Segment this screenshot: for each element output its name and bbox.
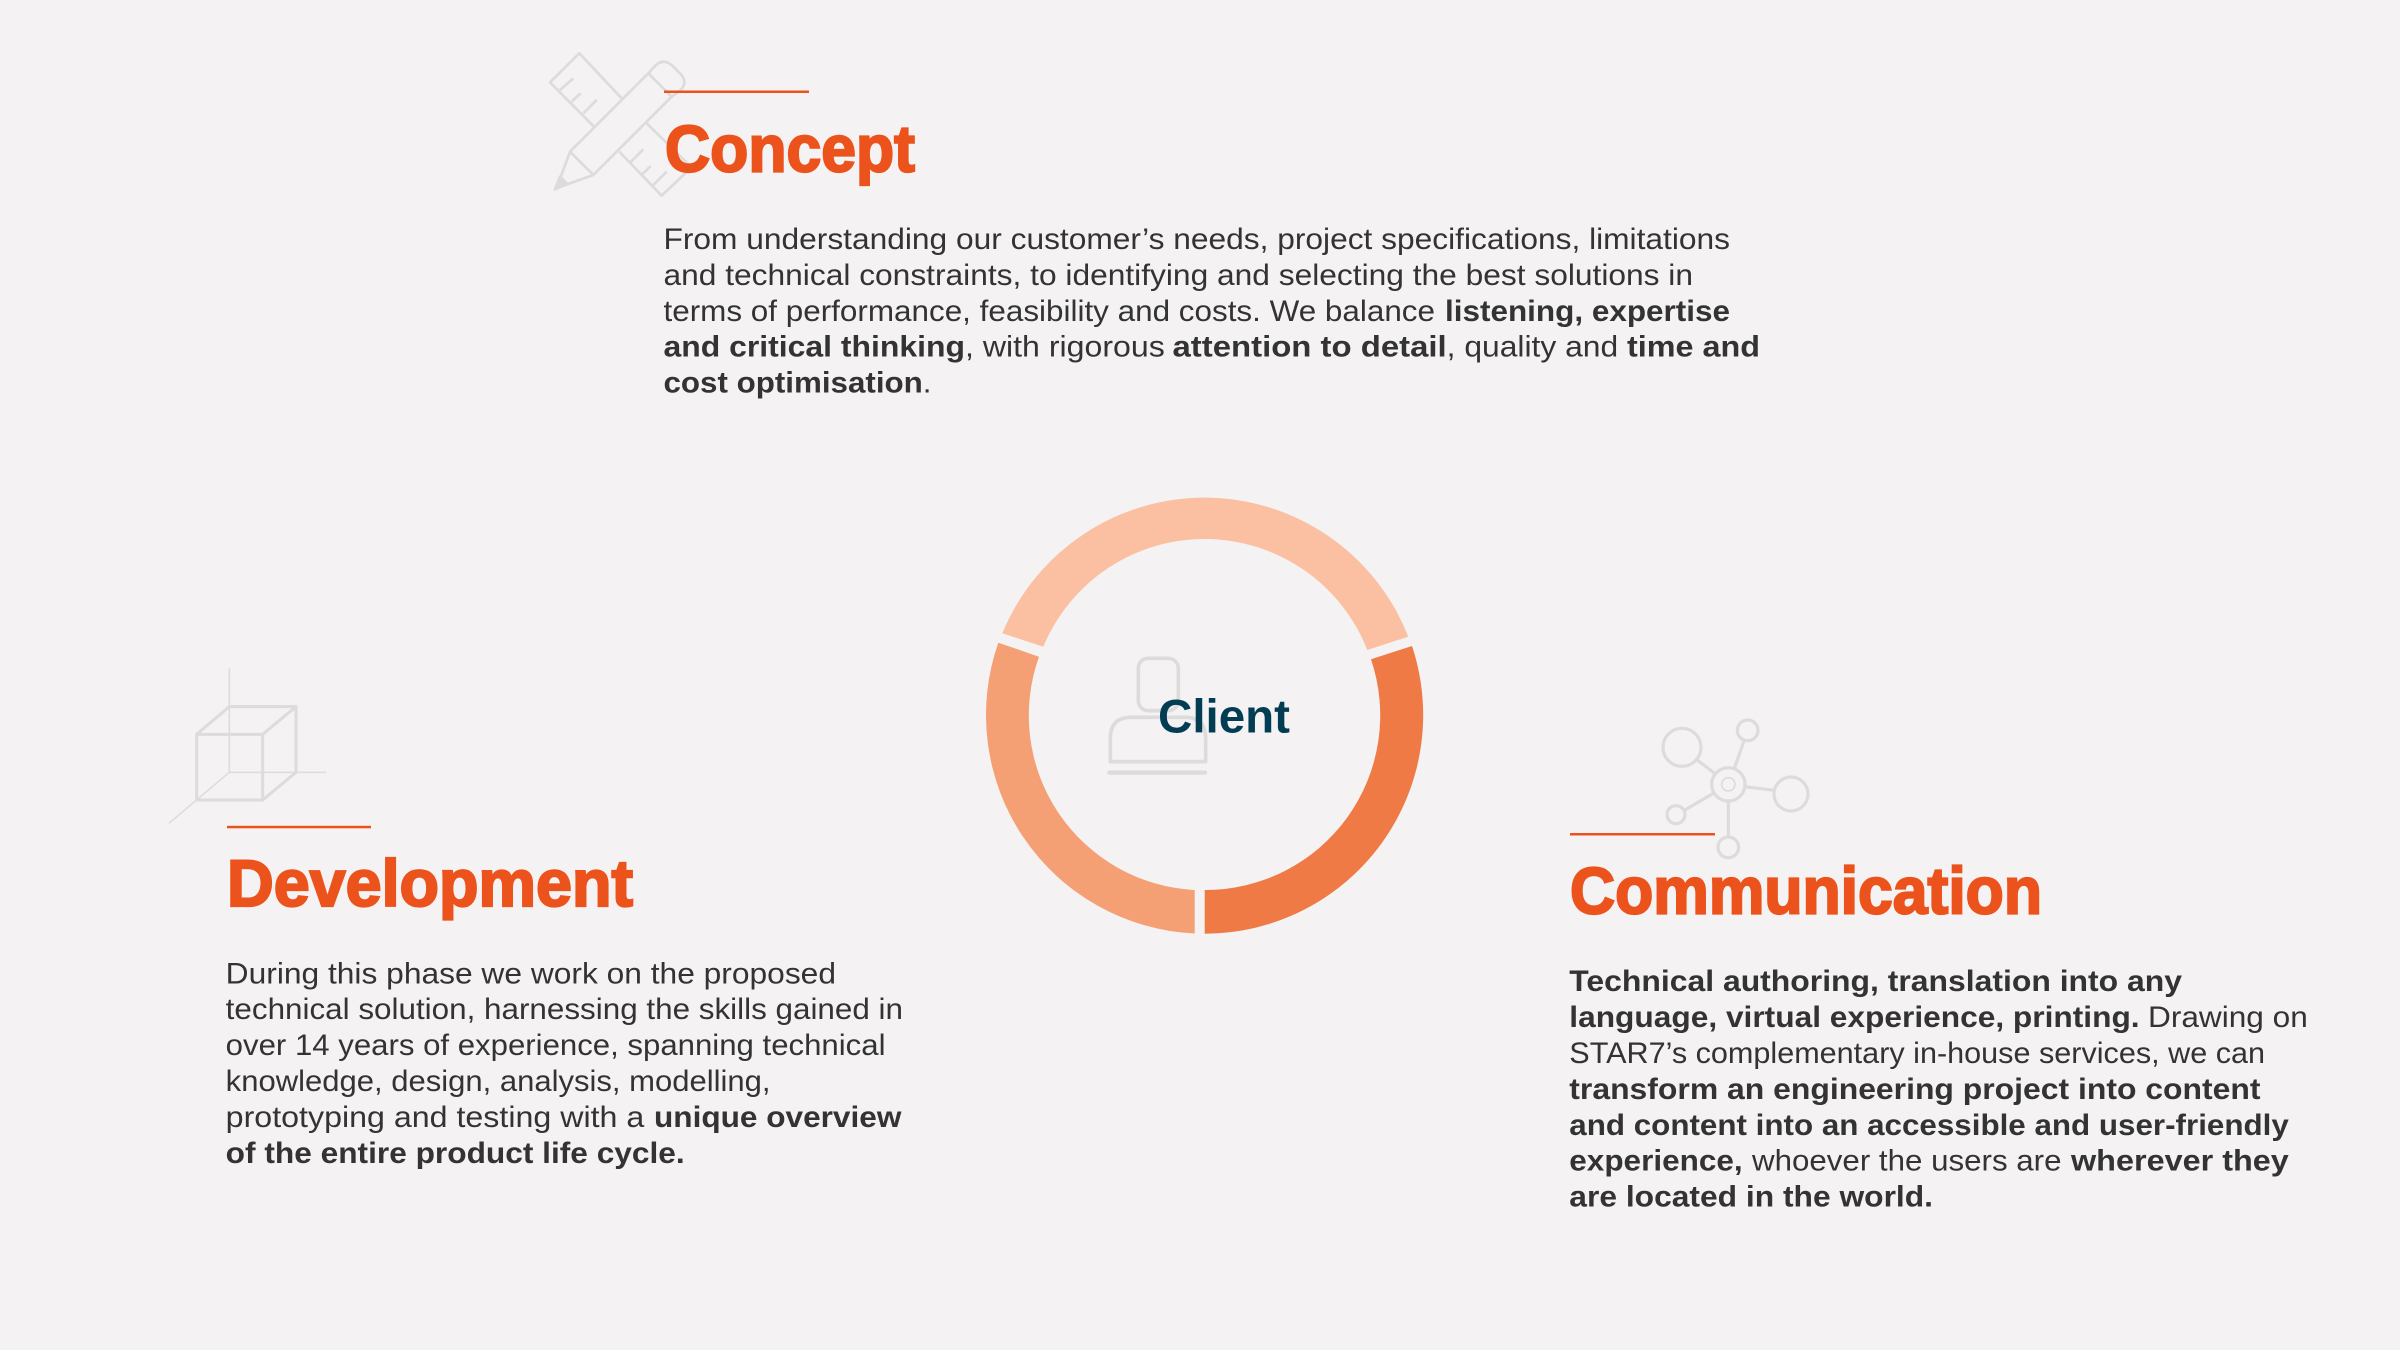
panel: client ring — [986, 498, 1423, 934]
text block: communication description: and content into an accessible and user-friendly — [1569, 1109, 2289, 1142]
text block: development description: over 14 years of experience, spanning technical — [226, 1029, 885, 1062]
text block: concept description: and technical constraints, to identifying and selecting the best solutions in — [664, 259, 1693, 292]
panel: development — [169, 668, 903, 1170]
ring segment: left — [986, 643, 1195, 934]
ring segment: top — [1002, 498, 1408, 650]
text block: concept description: cost optimisation . — [664, 366, 932, 400]
text block: concept description: and critical thinking — [664, 331, 965, 364]
icon: network — [1663, 720, 1808, 858]
accent rule — [1570, 833, 1715, 836]
text block: development description — [226, 957, 903, 1170]
text block: development description: of the entire product life cycle. — [226, 1137, 685, 1170]
ring segment: right — [1205, 646, 1423, 934]
text block: communication description: whoever the users are — [1751, 1145, 2062, 1178]
text block: communication description: transform an engineering project into content — [1569, 1073, 2261, 1106]
accent rule — [227, 826, 371, 828]
text block: concept description — [664, 223, 1760, 400]
heading: Concept: Concept — [665, 112, 915, 186]
text block: concept description: , with rigorous — [965, 331, 1165, 364]
text block: communication description: Drawing on — [2148, 1001, 2308, 1034]
text block: communication description: STAR7’s complementary in-house services, we can — [1569, 1037, 2265, 1070]
text block: communication description: are located in the world. — [1569, 1181, 1933, 1214]
text block: communication description: language, virtual experience, printing. — [1569, 1001, 2140, 1034]
text block: communication description — [1569, 965, 2308, 1214]
text block: development description: During this phase we work on the proposed — [226, 957, 836, 990]
text block: concept description: attention to detail — [1172, 331, 1447, 364]
heading: Development: Development — [227, 846, 633, 920]
text block: concept description: , quality and — [1447, 331, 1618, 364]
text block: communication description: wherever they — [2070, 1145, 2289, 1178]
panel: concept — [550, 53, 1760, 400]
text block: concept description: listening, expertise — [1445, 295, 1730, 328]
icon: person — [1109, 658, 1206, 773]
text block: development description: unique overview — [654, 1101, 902, 1134]
text block: communication description: experience, — [1569, 1145, 1743, 1178]
heading: Communication: Communication — [1570, 853, 2042, 927]
text block: communication description: Technical authoring, translation into any — [1569, 965, 2182, 998]
text block: development description: prototyping and testing with a — [226, 1101, 645, 1134]
text block: concept description: terms of performance, feasibility and costs. We balance — [664, 295, 1435, 328]
text block: concept description: From understanding our customer’s needs, project specifications, limitations — [664, 223, 1730, 256]
accent rule — [664, 90, 809, 93]
text block: concept description: time and — [1627, 331, 1760, 364]
text block: development description: technical solution, harnessing the skills gained in — [226, 993, 903, 1026]
panel: communication — [1569, 720, 2308, 1214]
icon: pencil and ruler — [550, 53, 692, 196]
text block: development description: knowledge, design, analysis, modelling, — [226, 1065, 770, 1098]
label: Client: Client — [1158, 690, 1290, 743]
icon: cube — [169, 668, 326, 823]
